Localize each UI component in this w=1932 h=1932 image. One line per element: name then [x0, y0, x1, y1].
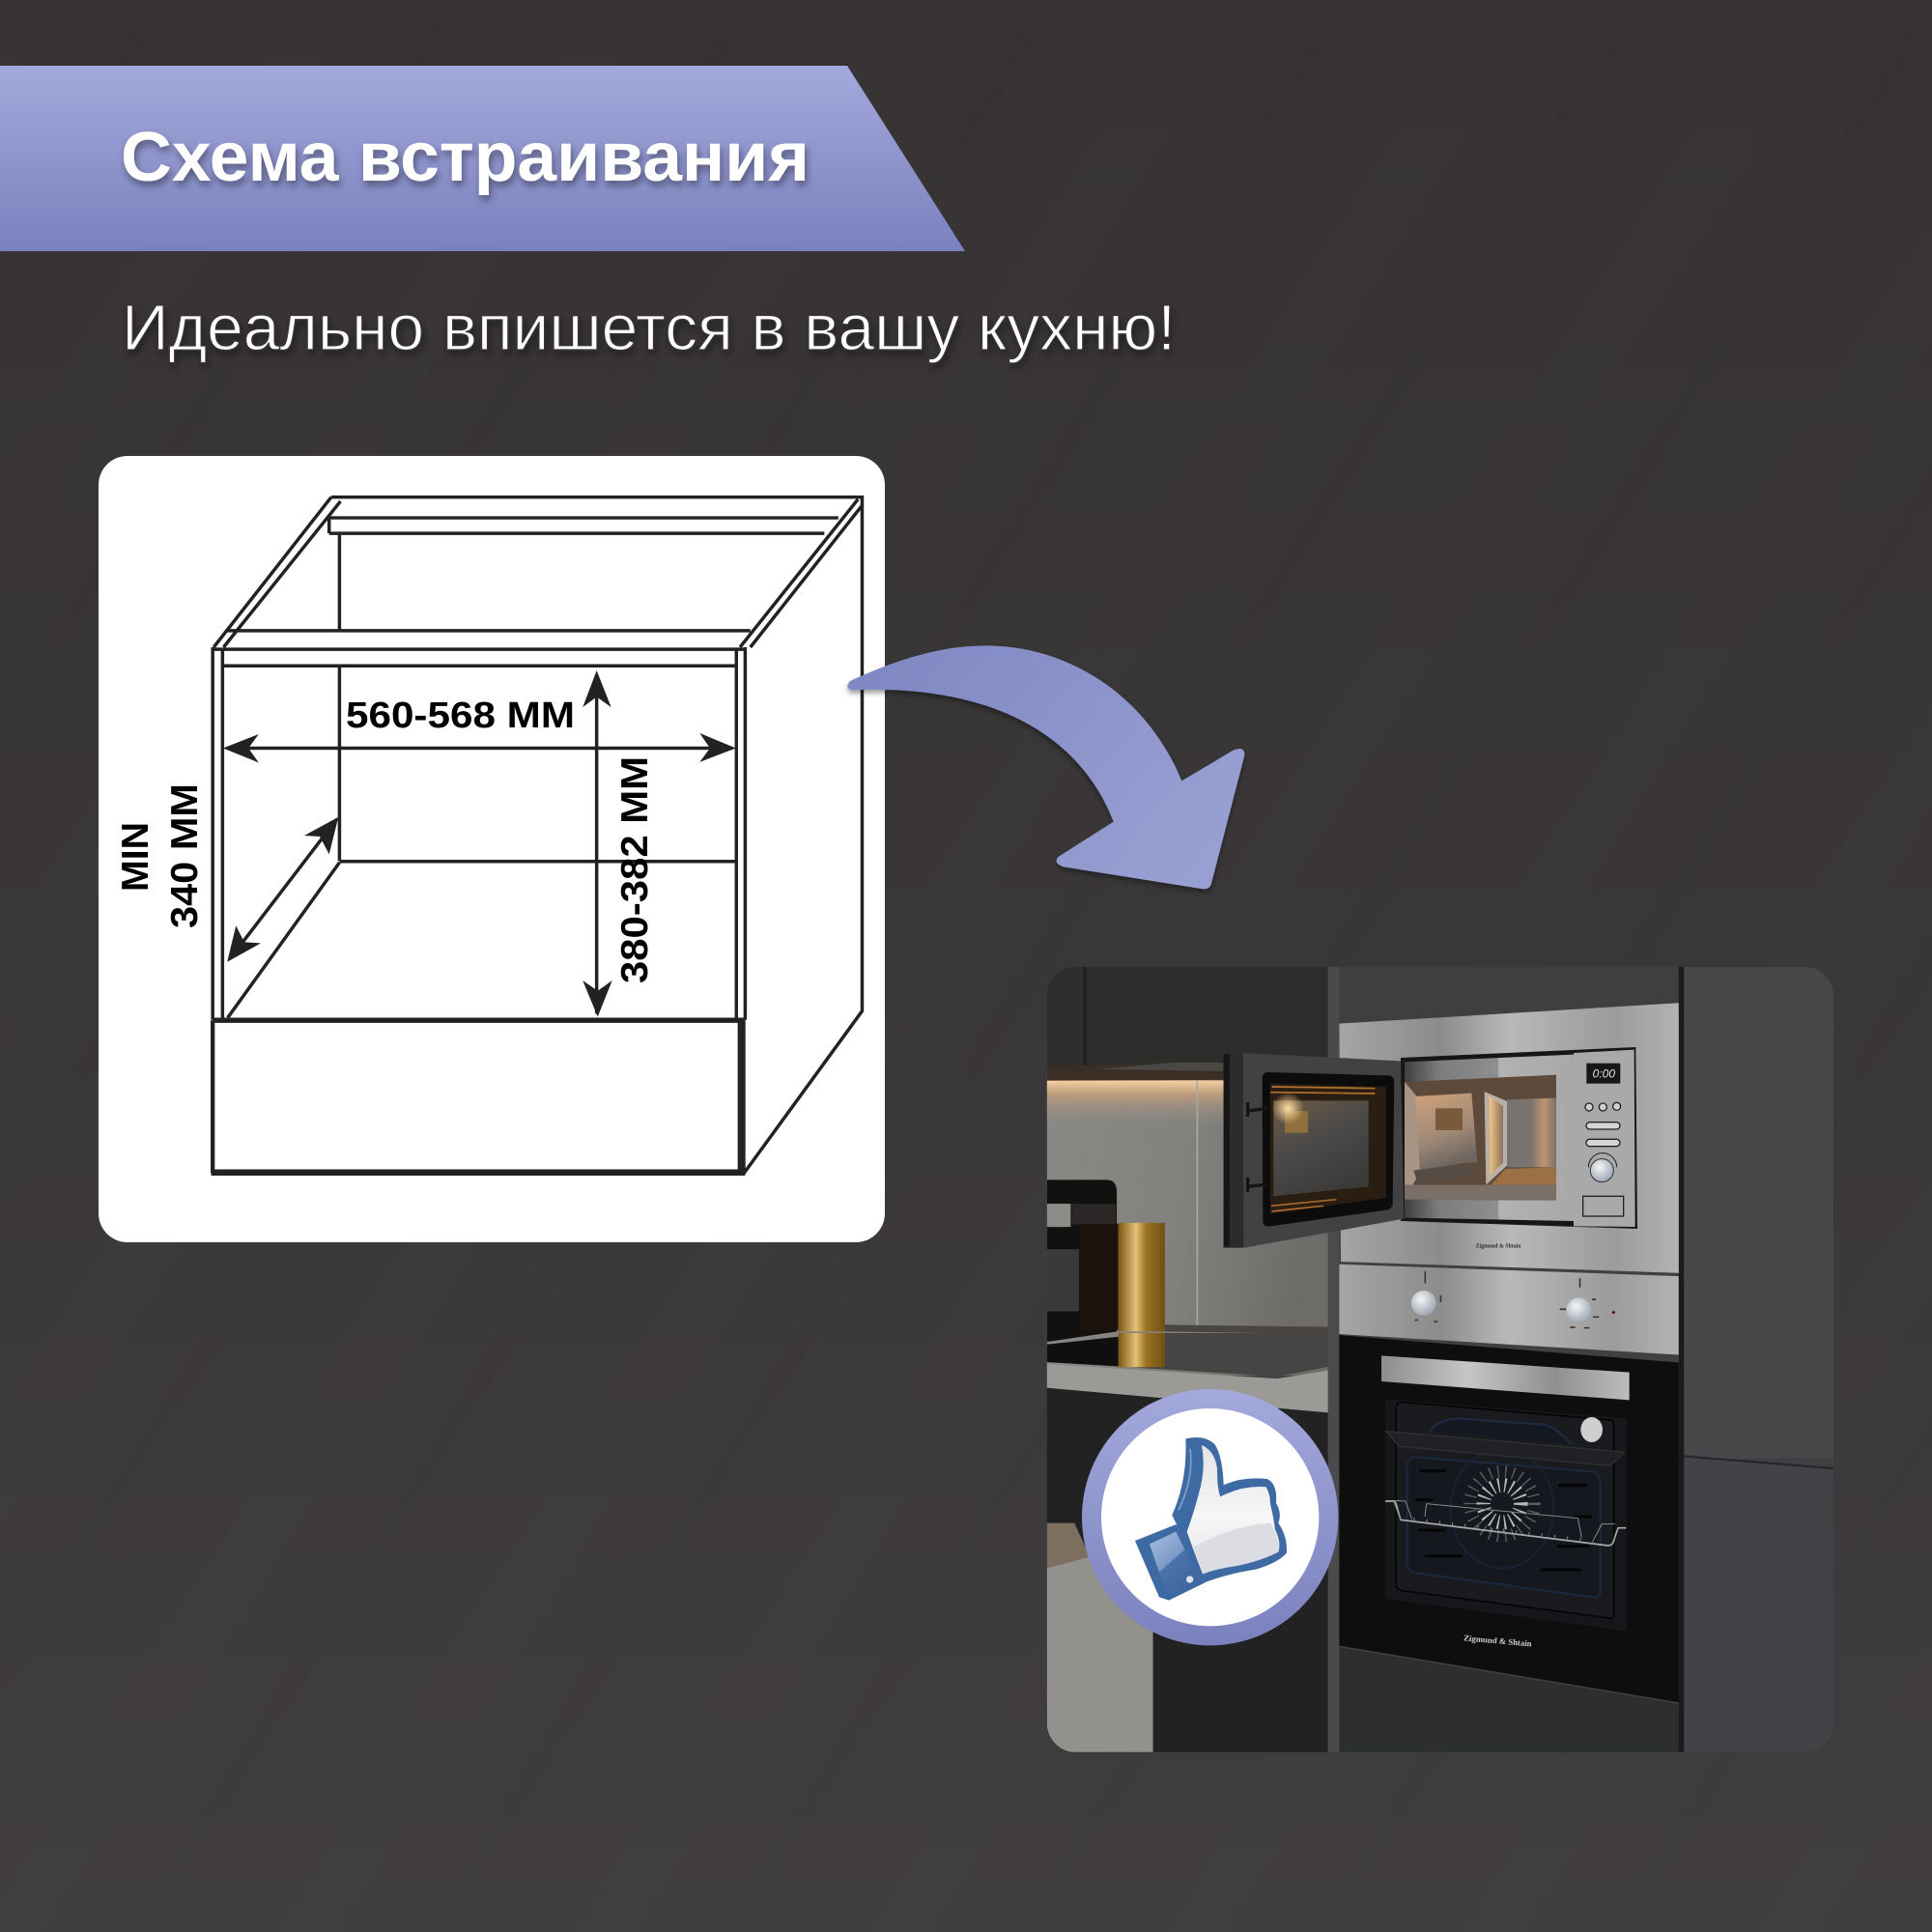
display: 0:00 [1593, 1066, 1615, 1080]
control strip [1339, 1264, 1679, 1354]
right tall cabinets [1684, 972, 1833, 1470]
badge: thumbs up [1082, 1389, 1338, 1645]
microwave frame [1339, 1003, 1681, 1273]
cooktop [1047, 1324, 1329, 1377]
gold cylinder [1119, 1223, 1165, 1331]
microwave control panel [1574, 1050, 1635, 1227]
tile wall with light [1047, 1065, 1329, 1376]
oven handle [1381, 1355, 1630, 1400]
cabinet line drawing [212, 497, 862, 1174]
oven body [1339, 1335, 1680, 1702]
oven window [1385, 1399, 1627, 1631]
microwave inner surround [1405, 1055, 1574, 1221]
display [1586, 1064, 1620, 1084]
brand: microwave: Zigmund & Shtain [1476, 1244, 1521, 1250]
panel: kitchen photo [1047, 967, 1836, 1752]
arrow: depth dimension [227, 817, 338, 962]
microwave cavity [1405, 1075, 1556, 1201]
arrow: scheme to photo [847, 645, 1244, 889]
knob left [1411, 1291, 1436, 1316]
column strip [1328, 967, 1339, 1752]
knob right [1567, 1298, 1591, 1322]
heading: title: Схема встраивания [121, 119, 810, 196]
icon: thumb hand [1172, 1437, 1287, 1582]
lower cabinets [1047, 1388, 1329, 1752]
panel: built-in cabinet scheme [99, 456, 885, 1242]
subtitle: Идеально впишется в вашу кухню! [122, 292, 1176, 364]
base cabinet [1339, 1647, 1680, 1752]
title banner [0, 66, 965, 251]
label: depth: 340 MM [164, 783, 206, 928]
microwave door [1224, 1053, 1404, 1248]
brand: oven: Zigmund & Shtain [1463, 1633, 1532, 1648]
arrow: width dimension [223, 733, 736, 762]
arrow: height dimension [582, 670, 612, 1016]
upper column [1339, 967, 1679, 1023]
icon: thumb cuff [1135, 1524, 1205, 1601]
coffee machine [1047, 1179, 1119, 1342]
oven (detail coordinates) [1381, 1355, 1630, 1648]
microwave body outline [1401, 1047, 1637, 1229]
microwave (detail coordinates) [1224, 1047, 1637, 1250]
upper left cabinets [1047, 967, 1329, 1081]
counter [1047, 1364, 1329, 1412]
label: height: 380-382 MM [614, 756, 656, 983]
wood shelf [1047, 1523, 1090, 1568]
photo base [1339, 1003, 1679, 1362]
label: min: MIN [115, 822, 156, 892]
label: width: 560-568 MM [346, 696, 575, 736]
concrete block [1047, 1556, 1153, 1752]
